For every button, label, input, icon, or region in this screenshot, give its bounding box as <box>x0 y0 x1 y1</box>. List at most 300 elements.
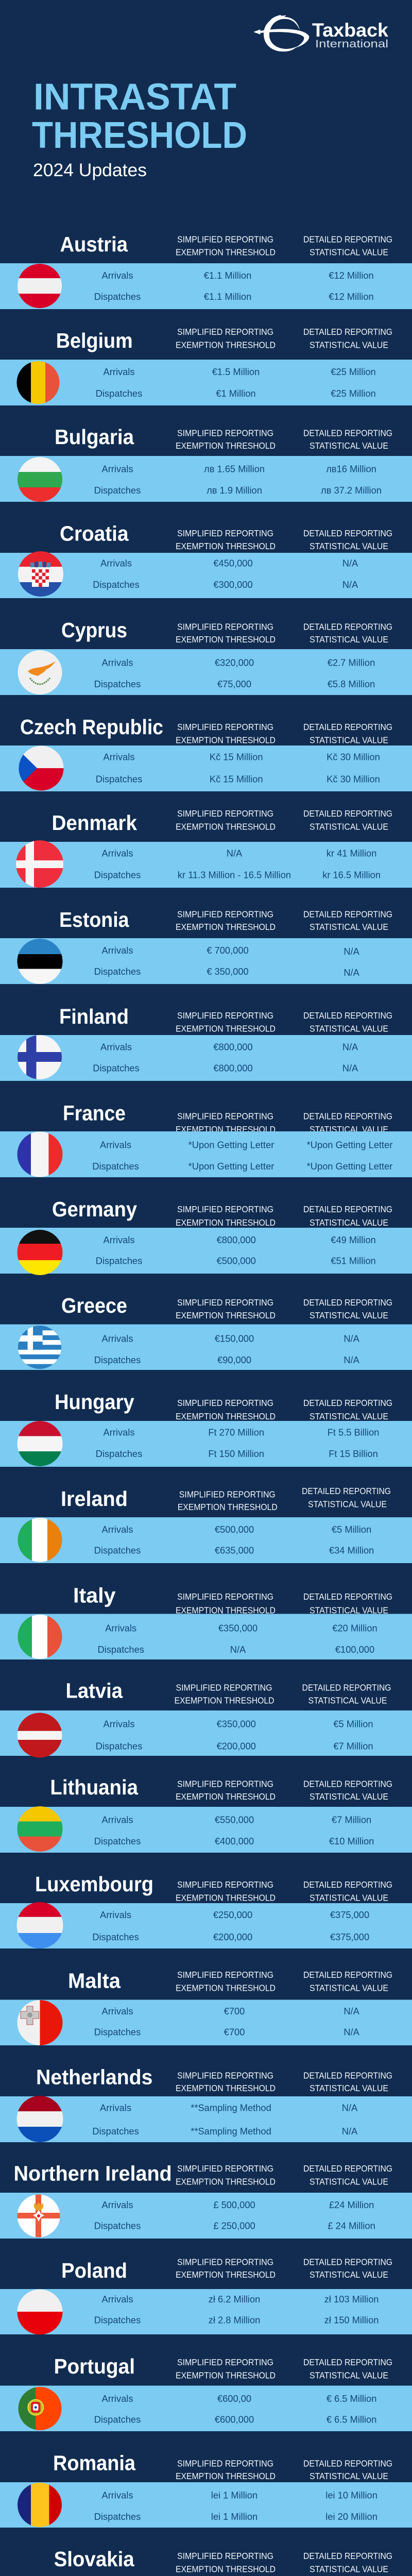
rows: N/A <box>344 1354 360 1365</box>
column headers: STATISTICAL VALUE <box>310 247 388 258</box>
column headers: SIMPLIFIED REPORTING <box>177 2070 273 2080</box>
panel: Austria <box>0 232 412 309</box>
rows: N/A <box>344 2006 360 2016</box>
rows <box>94 2006 360 2038</box>
column headers: STATISTICAL VALUE <box>310 1411 388 1421</box>
column headers: EXEMPTION THRESHOLD <box>176 2269 276 2280</box>
icon: Malta flag <box>18 2000 63 2045</box>
title <box>32 76 247 156</box>
rows: €320,000 <box>215 657 254 668</box>
rows: €800,000 <box>217 1234 256 1245</box>
column headers: STATISTICAL VALUE <box>310 634 388 645</box>
column headers: STATISTICAL VALUE <box>310 1217 388 1228</box>
data band <box>0 553 412 598</box>
column headers <box>176 1010 392 1033</box>
panel: Cyprus <box>0 618 412 696</box>
column headers: SIMPLIFIED REPORTING <box>177 1970 273 1980</box>
rows: €12 Million <box>329 291 374 302</box>
column headers <box>176 428 392 451</box>
rows: €200,000 <box>213 1931 252 1942</box>
column headers: STATISTICAL VALUE <box>310 1310 388 1320</box>
panel: Slovakia <box>0 2547 412 2576</box>
column headers: EXEMPTION THRESHOLD <box>178 1502 278 1512</box>
column headers: DETAILED REPORTING <box>303 1778 392 1789</box>
icon: Hungary flag <box>18 1421 63 1466</box>
heading: Ireland: Ireland <box>61 1487 128 1511</box>
column headers: SIMPLIFIED REPORTING <box>177 2257 273 2267</box>
rows: *Upon Getting Letter <box>188 1140 274 1150</box>
column headers: SIMPLIFIED REPORTING <box>177 909 273 919</box>
rows <box>94 270 374 302</box>
column headers: EXEMPTION THRESHOLD <box>176 735 276 745</box>
data band <box>0 1903 412 1948</box>
rows: €1.5 Million <box>212 366 260 377</box>
rows: Dispatches <box>94 2315 141 2326</box>
rows: *Upon Getting Letter <box>188 1161 274 1172</box>
column headers: EXEMPTION THRESHOLD <box>176 541 276 551</box>
panel: Latvia <box>0 1679 412 1759</box>
rows: € 6.5 Million <box>327 2414 376 2425</box>
column headers: STATISTICAL VALUE <box>310 2370 388 2380</box>
panel: Belgium <box>0 327 412 407</box>
panel: Estonia <box>0 908 412 986</box>
rows: lei 20 Million <box>325 2511 377 2522</box>
data band <box>0 2000 412 2045</box>
rows: lei 10 Million <box>325 2489 377 2501</box>
column headers: STATISTICAL VALUE <box>310 2176 388 2187</box>
icon: Netherlands flag <box>16 2096 63 2142</box>
data band <box>0 745 412 791</box>
column headers <box>176 1778 392 1802</box>
panel: Portugal <box>0 2354 412 2432</box>
rows: **Sampling Method <box>191 2126 271 2137</box>
heading: Lithuania: Lithuania <box>50 1775 139 1799</box>
heading: Latvia: Latvia <box>66 1679 123 1702</box>
rows: €75,000 <box>217 679 251 689</box>
rows: Arrivals <box>102 1815 133 1825</box>
panel: Bulgaria <box>0 425 412 503</box>
column headers: SIMPLIFIED REPORTING <box>177 1297 273 1308</box>
column headers: STATISTICAL VALUE <box>310 922 388 932</box>
column headers: EXEMPTION THRESHOLD <box>176 2471 276 2481</box>
rows <box>94 2489 377 2522</box>
data band <box>0 1807 412 1853</box>
panel: Croatia <box>0 521 412 599</box>
rows: €550,000 <box>215 1815 254 1825</box>
icon: Greece flag <box>18 1326 61 1369</box>
column headers: STATISTICAL VALUE <box>310 1892 388 1903</box>
rows: Ft 5.5 Billion <box>328 1427 379 1438</box>
data band <box>0 1035 412 1081</box>
column headers: DETAILED REPORTING <box>303 2551 392 2561</box>
heading: Italy: Italy <box>73 1584 116 1607</box>
column headers <box>176 2163 392 2187</box>
rows: €1.1 Million <box>204 291 251 302</box>
title: THRESHOLD <box>32 115 247 156</box>
column headers: STATISTICAL VALUE <box>310 1791 388 1802</box>
data band <box>0 842 412 888</box>
rows: Dispatches <box>94 1354 141 1365</box>
column headers: DETAILED REPORTING <box>303 808 392 819</box>
rows: €375,000 <box>330 1931 369 1942</box>
column headers <box>176 528 392 551</box>
rows: Arrivals <box>102 2294 133 2304</box>
rows: kr 41 Million <box>327 848 376 859</box>
rows: Dispatches <box>96 1256 142 1266</box>
heading: Slovakia: Slovakia <box>54 2547 135 2571</box>
rows: Dispatches <box>96 1741 142 1752</box>
column headers: EXEMPTION THRESHOLD <box>176 1892 276 1903</box>
heading: Czech Republic: Czech Republic <box>20 715 163 739</box>
rows: Dispatches <box>96 388 142 399</box>
rows: Dispatches <box>96 1448 142 1459</box>
column headers: EXEMPTION THRESHOLD <box>176 1605 276 1616</box>
rows <box>97 1623 377 1655</box>
icon: Northern Ireland flag <box>15 2192 67 2239</box>
icon: Croatia flag <box>18 551 63 597</box>
column headers <box>176 1398 392 1421</box>
rows <box>94 945 360 978</box>
column headers <box>176 1879 392 1903</box>
rows <box>92 1909 369 1942</box>
column headers <box>176 2070 392 2093</box>
heading: Cyprus: Cyprus <box>61 618 127 642</box>
rows: Dispatches <box>94 2221 141 2231</box>
column headers: EXEMPTION THRESHOLD <box>176 2370 276 2380</box>
icon: Czech Republic flag <box>19 746 64 790</box>
rows: €500,000 <box>215 1524 254 1535</box>
rows: €350,000 <box>218 1623 258 1634</box>
data band <box>0 263 412 309</box>
rows <box>94 1524 374 1556</box>
column headers: EXEMPTION THRESHOLD <box>176 2176 276 2187</box>
panel: Romania <box>0 2451 412 2530</box>
heading: Denmark: Denmark <box>52 811 137 835</box>
rows: *Upon Getting Letter <box>307 1140 392 1150</box>
heading: Belgium: Belgium <box>56 329 133 352</box>
rows: Arrivals <box>104 366 134 377</box>
rows: €90,000 <box>217 1354 251 1365</box>
data band <box>0 1710 412 1756</box>
column headers <box>176 2459 392 2481</box>
rows: лв 37.2 Million <box>321 485 382 496</box>
rows <box>96 752 380 785</box>
column headers: SIMPLIFIED REPORTING <box>177 1398 273 1408</box>
column headers: DETAILED REPORTING <box>303 2357 392 2367</box>
icon: Belgium flag <box>16 361 60 404</box>
data band <box>0 1421 412 1467</box>
rows: €300,000 <box>213 579 253 590</box>
heading: France: France <box>63 1101 126 1125</box>
icon: Germany flag <box>18 1230 63 1275</box>
rows: Arrivals <box>100 558 132 569</box>
column headers: DETAILED REPORTING <box>303 722 392 732</box>
rows: € 350,000 <box>207 966 249 977</box>
rows: £ 250,000 <box>213 2221 255 2231</box>
data band <box>0 2193 412 2239</box>
rows: €2.7 Million <box>328 657 375 668</box>
column headers: DETAILED REPORTING <box>303 2070 392 2080</box>
heading: Netherlands: Netherlands <box>36 2065 152 2089</box>
column headers <box>176 909 392 932</box>
rows: Arrivals <box>104 1234 134 1245</box>
data band <box>0 2385 412 2431</box>
heading: Estonia: Estonia <box>59 908 130 931</box>
rows: Dispatches <box>94 291 141 302</box>
rows: Dispatches <box>93 1062 140 1074</box>
rows: Arrivals <box>102 2489 133 2501</box>
rows: Dispatches <box>97 1644 144 1655</box>
panel: Finland <box>0 1005 412 1082</box>
rows: Arrivals <box>102 464 133 474</box>
panel: Ireland <box>0 1486 412 1564</box>
column headers: EXEMPTION THRESHOLD <box>176 340 276 350</box>
logo: Taxback International (top): International <box>315 38 388 50</box>
column headers <box>174 1682 391 1705</box>
rows: Dispatches <box>94 1836 141 1846</box>
rows <box>94 848 381 880</box>
rows: €20 Million <box>332 1623 377 1634</box>
heading: Austria: Austria <box>60 232 128 256</box>
column headers: SIMPLIFIED REPORTING <box>177 528 273 538</box>
rows <box>94 1333 360 1365</box>
column headers: DETAILED REPORTING <box>303 2163 392 2174</box>
column headers: STATISTICAL VALUE <box>310 2564 388 2574</box>
rows: Dispatches <box>94 870 141 880</box>
rows: Arrivals <box>100 1909 131 1920</box>
column headers: EXEMPTION THRESHOLD <box>176 2564 276 2574</box>
rows: Kč 15 Million <box>210 774 263 785</box>
column headers: STATISTICAL VALUE <box>310 1605 388 1616</box>
data band <box>0 649 412 695</box>
column headers: SIMPLIFIED REPORTING <box>177 2163 273 2174</box>
column headers: DETAILED REPORTING <box>303 428 392 438</box>
rows: €150,000 <box>215 1333 254 1344</box>
rows: €49 Million <box>331 1234 376 1245</box>
data band <box>0 1131 412 1177</box>
rows: Dispatches <box>94 1545 141 1556</box>
rows: zł 6.2 Million <box>209 2294 260 2304</box>
column headers: DETAILED REPORTING <box>303 621 392 632</box>
title: INTRASTAT <box>33 76 236 117</box>
rows: €5 Million <box>332 1524 371 1535</box>
rows: Kč 30 Million <box>327 774 380 785</box>
column headers: DETAILED REPORTING <box>303 1111 392 1121</box>
column headers: STATISTICAL VALUE <box>310 735 388 745</box>
rows: *Upon Getting Letter <box>307 1161 392 1172</box>
logo: Taxback International (top): Taxback <box>312 20 388 41</box>
column headers: DETAILED REPORTING <box>302 1486 391 1496</box>
rows <box>94 1815 374 1846</box>
rows: kr 16.5 Million <box>322 870 381 880</box>
rows: Dispatches <box>96 774 142 785</box>
rows: Arrivals <box>105 1623 136 1634</box>
column headers: DETAILED REPORTING <box>303 1010 392 1021</box>
rows <box>94 2199 375 2231</box>
column headers: STATISTICAL VALUE <box>310 1023 388 1033</box>
rows: N/A <box>342 2126 358 2137</box>
column headers: EXEMPTION THRESHOLD <box>176 2083 276 2093</box>
rows <box>92 2103 358 2137</box>
rows: €600,000 <box>215 2414 254 2425</box>
column headers: SIMPLIFIED REPORTING <box>177 234 273 244</box>
rows: €450,000 <box>213 558 253 569</box>
rows: €500,000 <box>217 1256 256 1266</box>
column headers: EXEMPTION THRESHOLD <box>176 1124 276 1134</box>
column headers: EXEMPTION THRESHOLD <box>176 247 276 258</box>
rows: €7 Million <box>333 1741 373 1752</box>
rows: Dispatches <box>94 966 141 977</box>
rows: Dispatches <box>93 579 140 590</box>
rows: N/A <box>344 946 360 957</box>
rows <box>94 2393 376 2425</box>
rows <box>94 2294 379 2326</box>
icon: Portugal flag <box>15 2385 64 2432</box>
column headers <box>176 1297 392 1320</box>
rows: N/A <box>342 1062 358 1074</box>
column headers: DETAILED REPORTING <box>303 2459 392 2469</box>
icon: Poland flag <box>15 2287 67 2336</box>
column headers: EXEMPTION THRESHOLD <box>176 1217 276 1228</box>
rows: N/A <box>230 1644 246 1655</box>
column headers: DETAILED REPORTING <box>303 2257 392 2267</box>
rows: Arrivals <box>104 1427 134 1438</box>
rows <box>96 1719 373 1752</box>
column headers <box>176 2551 392 2574</box>
data band <box>0 1517 412 1563</box>
heading: Germany: Germany <box>52 1197 137 1221</box>
column headers: SIMPLIFIED REPORTING <box>177 327 273 337</box>
heading: Bulgaria: Bulgaria <box>55 425 134 449</box>
rows: Arrivals <box>100 1140 131 1150</box>
data band <box>0 2482 412 2528</box>
rows: Ft 150 Million <box>208 1448 264 1459</box>
rows: lei 1 Million <box>211 2489 258 2501</box>
rows: N/A <box>342 558 358 569</box>
column headers: EXEMPTION THRESHOLD <box>176 821 276 832</box>
rows: Dispatches <box>94 2414 141 2425</box>
panel: Malta <box>0 1969 412 2046</box>
icon: Romania flag <box>15 2481 64 2530</box>
data band <box>0 1324 412 1370</box>
column headers: DETAILED REPORTING <box>303 1297 392 1308</box>
icon: Denmark flag <box>16 840 63 888</box>
rows: Arrivals <box>102 2393 133 2404</box>
column headers: DETAILED REPORTING <box>303 1879 392 1890</box>
column headers: STATISTICAL VALUE <box>310 440 388 451</box>
panel: France <box>0 1101 412 1178</box>
column headers: DETAILED REPORTING <box>303 528 392 538</box>
rows: Arrivals <box>100 1042 132 1053</box>
panel: Poland <box>0 2257 412 2336</box>
panel: Lithuania <box>0 1775 412 1853</box>
column headers: SIMPLIFIED REPORTING <box>177 1111 273 1121</box>
rows: €10 Million <box>329 1836 374 1846</box>
column headers <box>176 327 392 350</box>
icon: Austria flag <box>18 264 62 308</box>
column headers <box>176 234 392 258</box>
rows: €350,000 <box>217 1719 256 1729</box>
column headers: SIMPLIFIED REPORTING <box>177 1879 273 1890</box>
icon: France flag <box>18 1131 63 1177</box>
rows: N/A <box>344 967 360 978</box>
rows: €100,000 <box>335 1644 374 1655</box>
column headers: SIMPLIFIED REPORTING <box>177 808 273 819</box>
rows: Dispatches <box>94 679 141 689</box>
column headers: STATISTICAL VALUE <box>310 821 388 832</box>
column headers: DETAILED REPORTING <box>303 1398 392 1408</box>
panel: Northern Ireland <box>0 2162 412 2239</box>
column headers: EXEMPTION THRESHOLD <box>176 922 276 932</box>
rows: лв 1.65 Million <box>204 464 265 474</box>
rows: Arrivals <box>100 2103 131 2113</box>
column headers <box>176 621 392 645</box>
rows: €5.8 Million <box>328 679 375 689</box>
column headers: EXEMPTION THRESHOLD <box>176 1411 276 1421</box>
rows: Dispatches <box>94 2511 141 2522</box>
icon: Estonia flag <box>18 939 63 984</box>
column headers: STATISTICAL VALUE <box>310 1124 388 1134</box>
data band <box>0 360 412 405</box>
rows: Dispatches <box>92 1931 139 1942</box>
rows: Dispatches <box>94 2027 141 2038</box>
column headers <box>176 2357 392 2380</box>
column headers: DETAILED REPORTING <box>303 234 392 244</box>
icon: Luxembourg flag <box>16 1902 63 1948</box>
column headers: DETAILED REPORTING <box>303 1591 392 1602</box>
rows: €5 Million <box>333 1719 373 1729</box>
column headers <box>178 1486 391 1512</box>
rows: €800,000 <box>213 1062 253 1074</box>
column headers: STATISTICAL VALUE <box>310 340 388 350</box>
heading: Greece: Greece <box>61 1294 127 1317</box>
column headers: SIMPLIFIED REPORTING <box>177 2551 273 2561</box>
rows: N/A <box>227 848 243 859</box>
column headers <box>176 808 392 832</box>
panel: Italy <box>0 1584 412 1660</box>
rows: Kč 30 Million <box>327 752 380 762</box>
column headers: SIMPLIFIED REPORTING <box>177 1591 273 1602</box>
rows: €375,000 <box>330 1909 369 1920</box>
icon: Ireland flag <box>18 1518 62 1562</box>
heading: Finland: Finland <box>59 1005 129 1028</box>
rows: лв 1.9 Million <box>207 485 262 496</box>
rows: €400,000 <box>215 1836 254 1846</box>
column headers: SIMPLIFIED REPORTING <box>177 1204 273 1214</box>
column headers: SIMPLIFIED REPORTING <box>179 1489 276 1499</box>
column headers: DETAILED REPORTING <box>303 1970 392 1980</box>
column headers: DETAILED REPORTING <box>303 909 392 919</box>
rows <box>92 1140 392 1172</box>
column headers: EXEMPTION THRESHOLD <box>176 440 276 451</box>
panel: Czech Republic <box>0 715 412 794</box>
column headers: SIMPLIFIED REPORTING <box>177 722 273 732</box>
rows: €51 Million <box>331 1256 376 1266</box>
rows: lei 1 Million <box>211 2511 258 2522</box>
rows: €600,00 <box>217 2393 251 2404</box>
rows: Arrivals <box>102 848 133 859</box>
rows: €200,000 <box>217 1741 256 1752</box>
rows: Arrivals <box>104 1719 134 1729</box>
column headers: EXEMPTION THRESHOLD <box>176 634 276 645</box>
rows: €635,000 <box>215 1545 254 1556</box>
icon: Lithuania flag <box>18 1806 63 1852</box>
column headers: SIMPLIFIED REPORTING <box>177 1010 273 1021</box>
data band <box>0 1228 412 1274</box>
column headers: EXEMPTION THRESHOLD <box>174 1695 274 1705</box>
column headers: SIMPLIFIED REPORTING <box>177 1778 273 1789</box>
icon: Cyprus flag <box>18 650 62 694</box>
